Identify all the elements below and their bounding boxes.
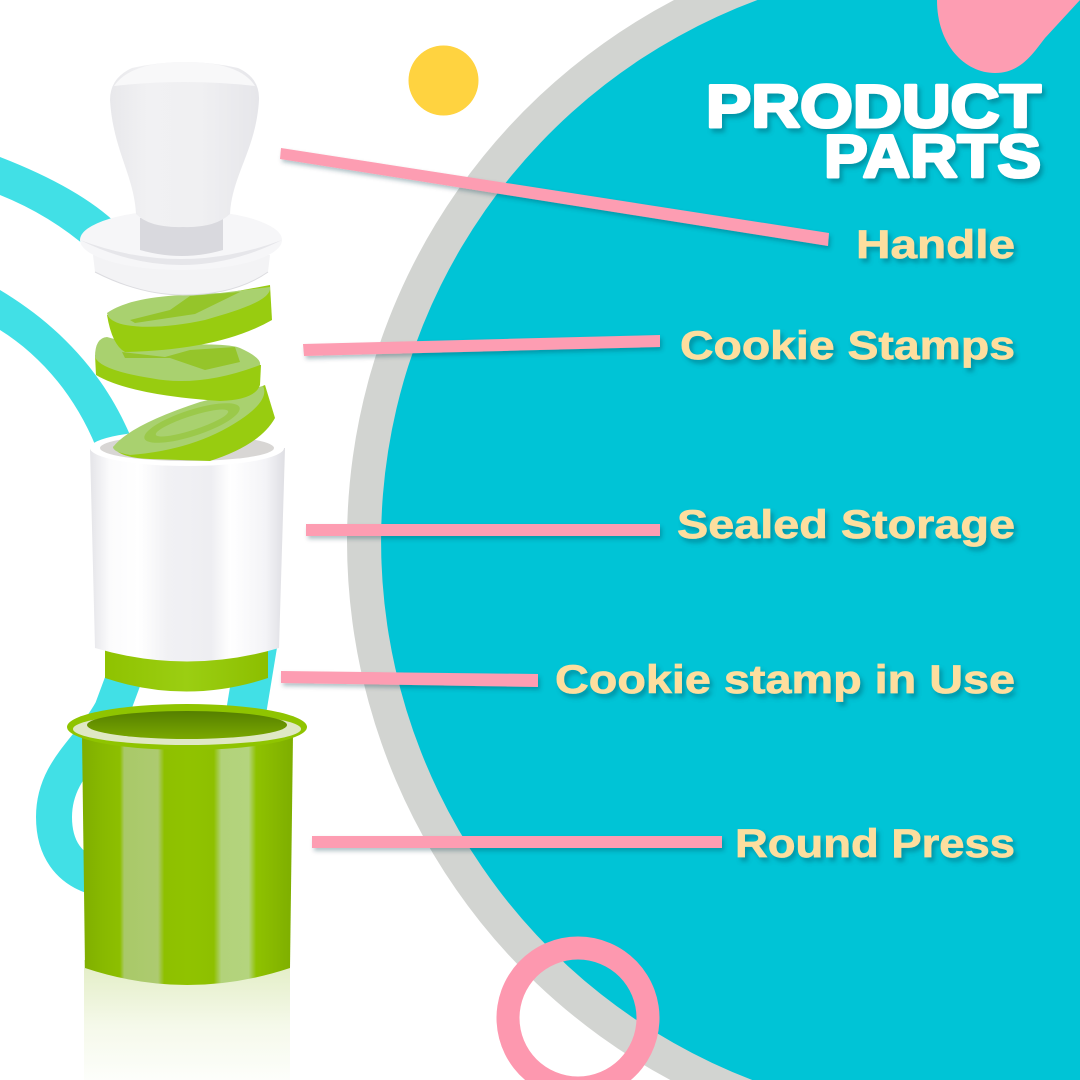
- label: Cookie stamp in Use: Cookie stamp in Use: [555, 658, 1015, 702]
- decoration: pink ring: [496, 937, 660, 1080]
- label: Round Press: Round Press: [735, 822, 1015, 866]
- decoration: teal swirl behind product: [0, 157, 258, 876]
- label: Sealed Storage: Sealed Storage: [677, 503, 1015, 547]
- background: teal circle: [381, 0, 1080, 1080]
- product: cookie stamp middle: [95, 337, 261, 401]
- label: Cookie Stamps: Cookie Stamps: [680, 324, 1015, 368]
- title: PARTS: [824, 123, 1041, 190]
- product: round press: [67, 704, 307, 1080]
- product: sealed storage: [90, 430, 285, 662]
- product: cookie stamp in use: [105, 645, 268, 692]
- product: handle: [80, 62, 282, 295]
- title: PRODUCT: [706, 73, 1041, 140]
- leader lines: [280, 148, 829, 848]
- title: [706, 73, 1041, 190]
- label: Handle: Handle: [856, 223, 1015, 267]
- background: gray ring: [347, 0, 1080, 1080]
- decoration: pink blob top right: [937, 0, 1080, 73]
- decoration: yellow dot: [408, 46, 478, 116]
- product: press with exploded parts: [67, 62, 307, 1080]
- product: cookie stamp top: [107, 285, 272, 352]
- product: cookie stamp bottom: [113, 385, 275, 461]
